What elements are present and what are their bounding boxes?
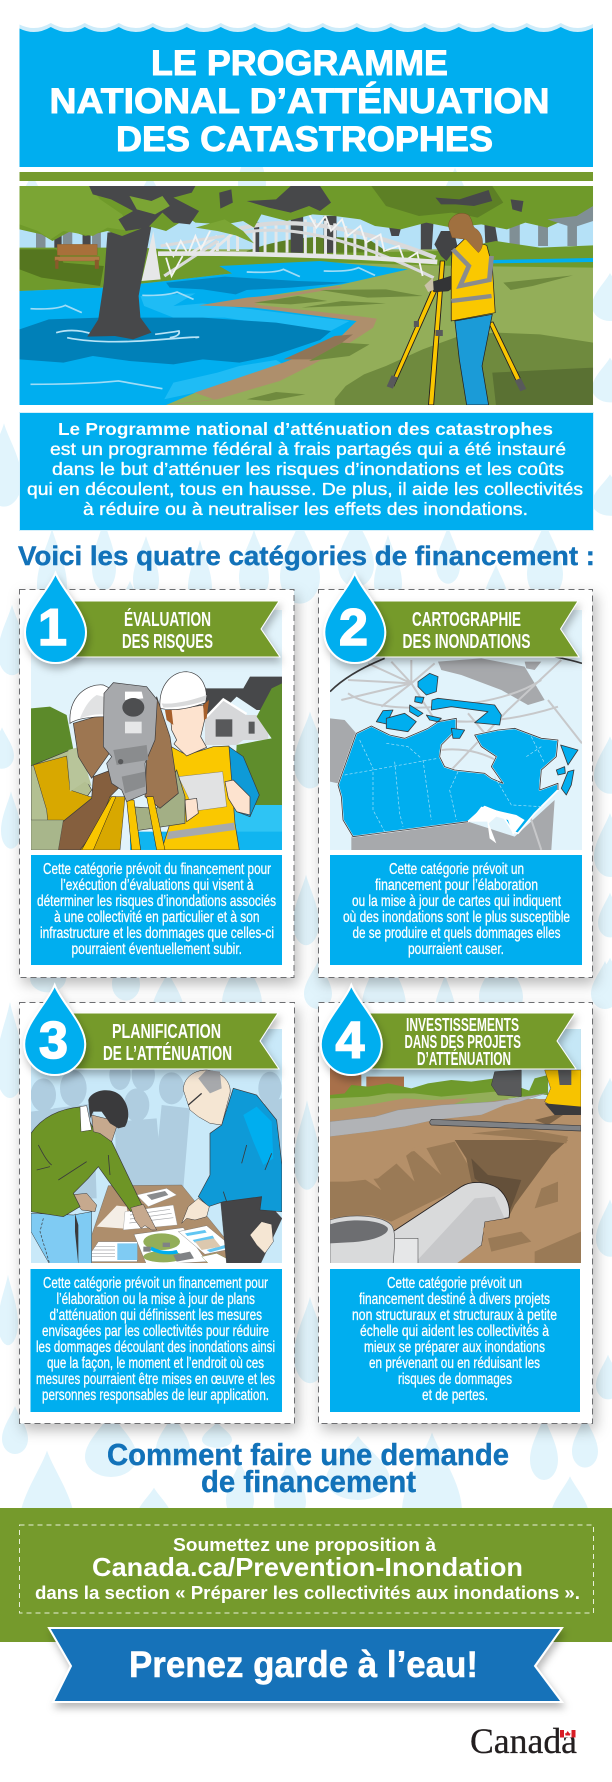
how to apply heading: Comment faire une demande (107, 1437, 509, 1472)
illustration: map of Canada (330, 610, 582, 850)
description text box: pourraient éventuellement subir. (72, 941, 242, 958)
title text: NATIONAL D’ATTÉNUATION (50, 81, 550, 121)
green application band (0, 1508, 612, 1642)
description text box: Cette catégorie prévoit un financement pour (43, 1275, 268, 1292)
intro paragraph: dans le but d’atténuer les risques d’inondations et les coûts (52, 459, 564, 479)
description text box: risques de dommages (398, 1371, 512, 1388)
ribbon heading (70, 1013, 279, 1069)
water drop number 1: 1 (38, 599, 67, 657)
description text box: que la façon, le moment et l’endroit où ces (47, 1355, 264, 1372)
description text box: Cette catégorie prévoit un (389, 861, 524, 878)
ribbon heading: PLANIFICATION (112, 1021, 221, 1043)
title banner (17, 23, 595, 167)
intro paragraph: qui en découlent, tous en hausse. De plus, il aide les collectivités (27, 479, 583, 499)
card 2: cartographie des inondations (318, 573, 592, 978)
title text: DES CATASTROPHES (116, 120, 493, 159)
ribbon heading (370, 601, 579, 657)
description text box: à une collectivité en particulier et à son (54, 909, 260, 926)
blue closing ribbon (49, 1628, 562, 1702)
water drop number 3: 3 (39, 1012, 68, 1070)
description text box: en prévenant ou en réduisant les (369, 1355, 540, 1372)
description text box: envisagées par les collectivités pour réduire (42, 1323, 269, 1340)
description text box: pourraient causer. (408, 941, 504, 958)
illustration: storm pipe trench (330, 1029, 581, 1265)
blue closing ribbon: Prenez garde à l’eau! (129, 1644, 478, 1685)
description text box: Cette catégorie prévoit un (387, 1275, 522, 1292)
description text box: personnes responsables de leur application. (42, 1387, 269, 1404)
intro paragraph (27, 419, 583, 519)
water drop number 2 (324, 573, 385, 663)
description text box: financement destiné à divers projets (359, 1291, 550, 1308)
application instructions: dans la section « Préparer les collectivités aux inondations ». (35, 1583, 580, 1603)
ribbon heading: CARTOGRAPHIE (412, 609, 521, 631)
description text box (30, 1269, 282, 1412)
water drop number 2: 2 (339, 599, 368, 657)
water drop number 1 (25, 573, 86, 663)
hero illustration: surveyor by flooded river and bridge (20, 186, 593, 405)
description text box (330, 1269, 580, 1412)
description text box: infrastructure et les dommages que celles-ci (40, 925, 274, 942)
card 1: évaluation des risques (20, 573, 294, 978)
how to apply heading (107, 1437, 509, 1499)
ribbon heading: DANS DES PROJETS (404, 1031, 521, 1052)
ribbon heading: DES INONDATIONS (402, 631, 530, 653)
description text box: mieux se préparer aux inondations (364, 1339, 545, 1356)
Canada wordmark: Canada (470, 1721, 577, 1761)
description text box: d’atténuation qui définissent les mesures (50, 1307, 262, 1324)
card 4: investissements dans des projets d'atténuation (318, 985, 592, 1424)
description text box: échelle qui aident les collectivités à (360, 1323, 549, 1340)
description text box: et de pertes. (422, 1387, 488, 1404)
description text box (330, 855, 582, 965)
description text box: l’élaboration ou la mise à jour de plans (56, 1291, 255, 1308)
ribbon heading: DE L’ATTÉNUATION (103, 1042, 232, 1065)
ribbon heading (370, 1013, 576, 1069)
icon: Canadian flag (560, 1730, 576, 1738)
application instructions (35, 1535, 580, 1603)
ribbon heading: D’ATTÉNUATION (417, 1048, 511, 1069)
how to apply heading: de financement (201, 1464, 416, 1499)
water drop number 4 (321, 985, 382, 1075)
intro paragraph: à réduire ou à neutraliser les effets des inondations. (83, 499, 528, 519)
description text box: mesures pourraient être mises en œuvre et les (36, 1371, 275, 1388)
description text box: déterminer les risques d’inondations associés (37, 893, 276, 910)
illustration: two surveyors with instrument (31, 610, 282, 850)
intro text panel (20, 412, 594, 530)
intro paragraph: est un programme fédéral à frais partagés qui a été instauré (50, 439, 566, 459)
title text: LE PROGRAMME (151, 44, 448, 83)
intro paragraph: Le Programme national d’atténuation des catastrophes (58, 419, 553, 439)
card 3: planification de l'atténuation (20, 985, 294, 1424)
ribbon heading: ÉVALUATION (124, 608, 211, 631)
water drop number 3 (24, 985, 85, 1075)
application instructions: Canada.ca/Prevention-Inondation (92, 1552, 523, 1582)
description text box: Cette catégorie prévoit du financement pour (43, 861, 271, 878)
description text box: l’exécution d’évaluations qui visent à (60, 877, 254, 894)
section heading: Voici les quatre catégories de financement : (18, 541, 595, 571)
ribbon heading: INVESTISSEMENTS (406, 1014, 519, 1035)
description text box: financement pour l’élaboration (375, 877, 538, 894)
ribbon heading: DES RISQUES (122, 631, 213, 653)
illustration: two men studying plans (31, 1029, 282, 1265)
title text (50, 44, 550, 159)
application instructions: Soumettez une proposition à (173, 1535, 437, 1555)
description text box: les dommages découlant des inondations ainsi (36, 1339, 275, 1356)
description text box (31, 855, 282, 965)
ribbon heading (70, 601, 280, 657)
green divider bar (20, 172, 593, 181)
water drop number 4: 4 (336, 1012, 365, 1070)
